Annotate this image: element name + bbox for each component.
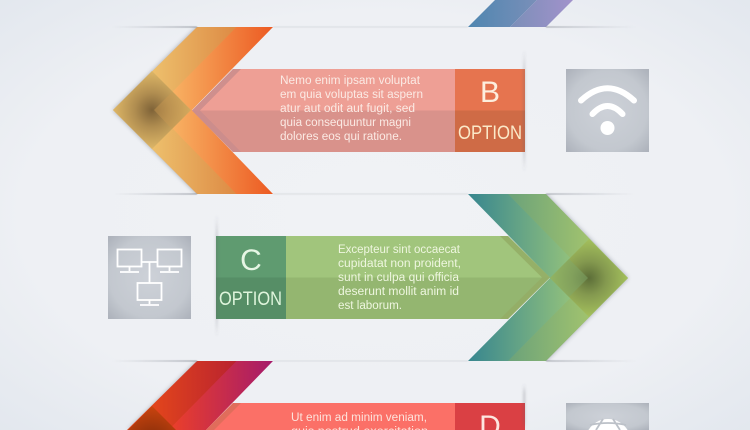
bar C text: est laborum. — [338, 300, 402, 312]
icon: globe — [566, 403, 649, 430]
horizontal slit shadows — [112, 26, 636, 362]
icon: wifi — [566, 69, 649, 152]
bar C text: cupidatat non proident, — [338, 258, 461, 270]
bar C label: C — [240, 244, 262, 277]
bar B — [192, 69, 525, 152]
bar C text: sunt in culpa qui officia — [338, 272, 460, 284]
bar B text: quia consequuntur magni — [280, 117, 411, 129]
icon: network — [108, 236, 191, 319]
chevron A fragment — [468, 0, 573, 27]
bar B text: Nemo enim ipsam voluptat — [280, 75, 421, 87]
chevron C — [468, 194, 628, 361]
bar B text: atur aut odit aut fugit, sed — [280, 103, 415, 115]
bar D text: Ut enim ad minim veniam, — [291, 412, 427, 424]
bar C text: deserunt mollit anim id — [338, 286, 459, 298]
bar C — [216, 236, 550, 319]
vertical panel shadows — [216, 50, 525, 430]
bar D — [206, 403, 525, 430]
chevron B — [113, 27, 273, 194]
bar B text: dolores eos qui ratione. — [280, 131, 402, 143]
chevron D — [127, 361, 273, 430]
bar B text: em quia voluptas sit aspern — [280, 89, 423, 101]
bar B label: B — [480, 76, 500, 109]
bar B: OPTION — [458, 123, 522, 144]
bar C text: Excepteur sint occaecat — [338, 244, 461, 256]
bar C: OPTION — [219, 289, 282, 310]
